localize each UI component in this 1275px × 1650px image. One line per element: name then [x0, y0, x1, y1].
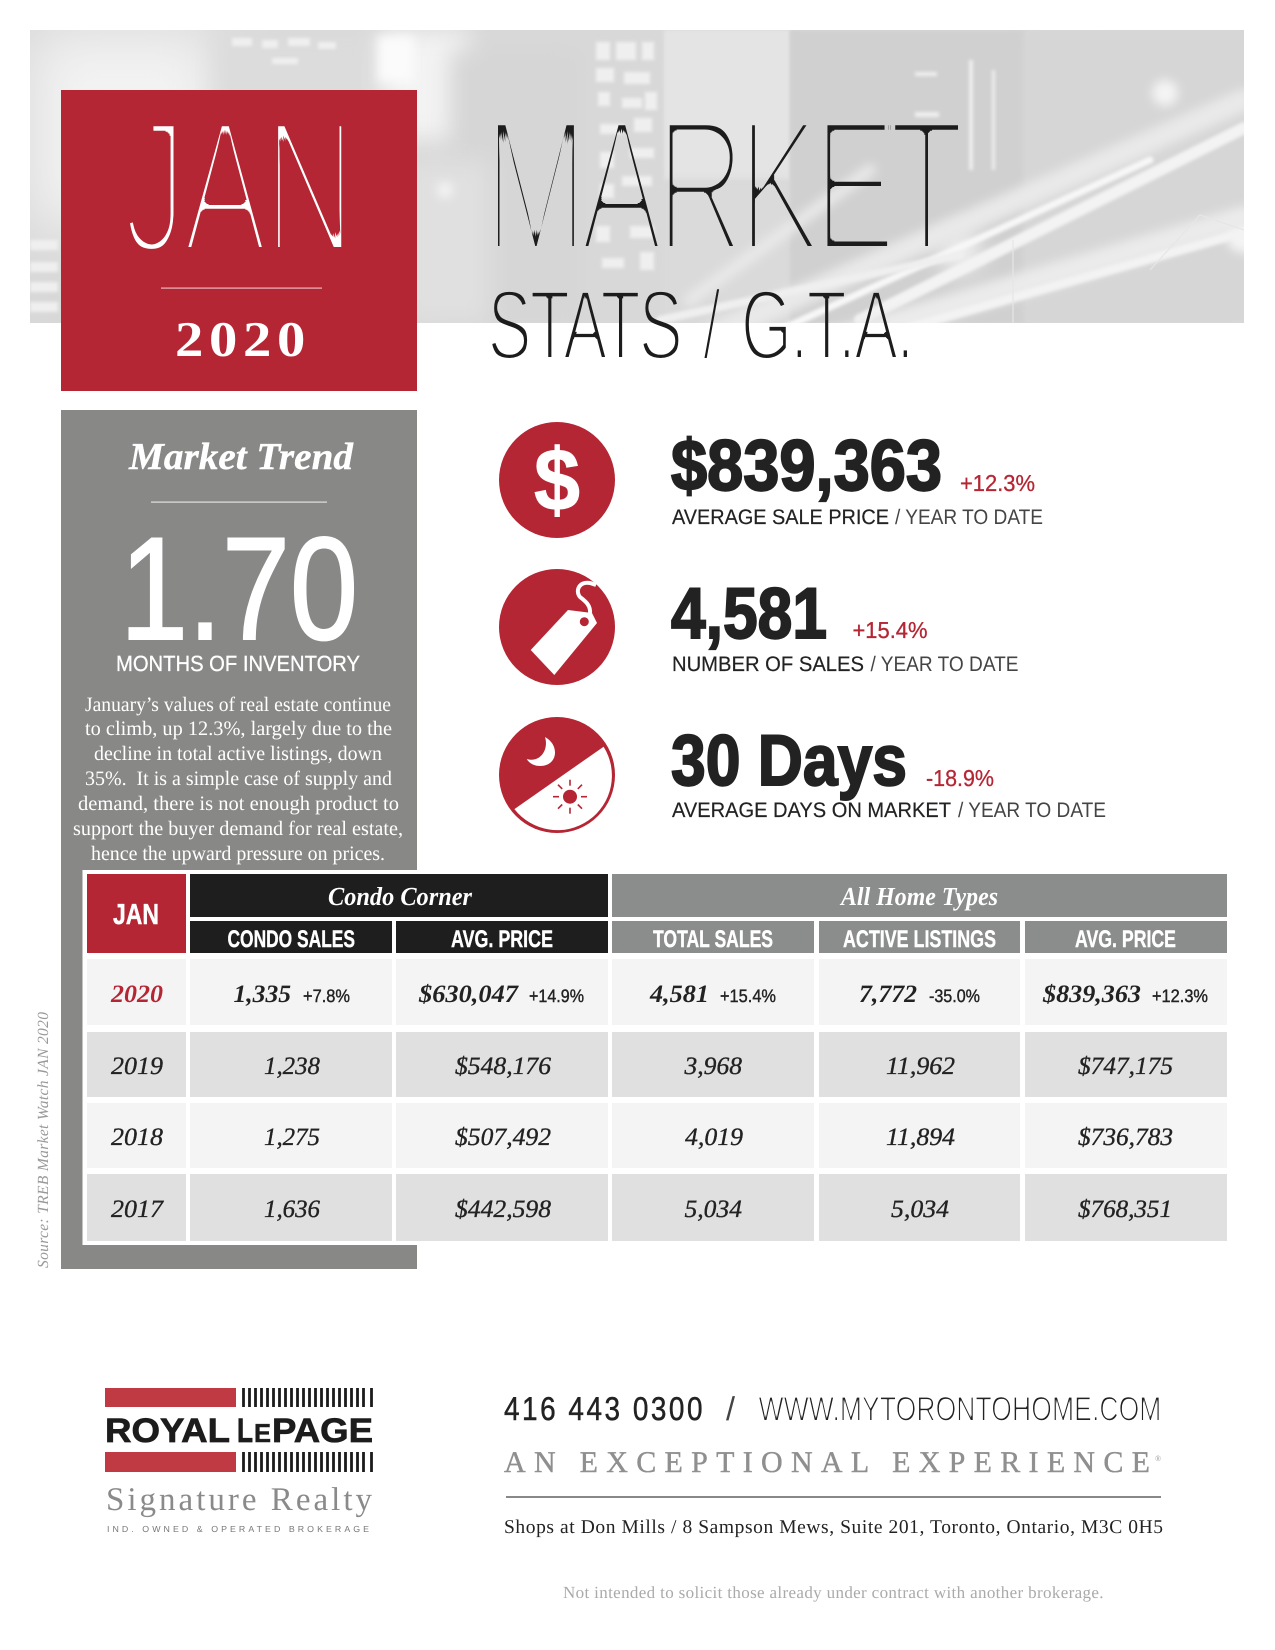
row 2017: 1,636: [264, 1196, 320, 1223]
row 2019: $548,176: [455, 1053, 552, 1080]
row 2017: 5,034: [891, 1196, 949, 1223]
source note: Source: TREB Market Watch JAN 2020: [35, 1012, 52, 1268]
value: 4,581: 4,581: [671, 574, 827, 654]
disclaimer: Not intended to solicit those already under contract with another brokerage.: [563, 1583, 1104, 1602]
subtitle: STATS / G.T.A.: STATS / G.T.A.: [487, 269, 912, 380]
row 2018: 11,894: [886, 1124, 955, 1151]
contact: phone and website: /: [726, 1390, 736, 1427]
label: average sale price: [672, 506, 1043, 529]
row 2018: $507,492: [455, 1124, 551, 1151]
label: number of sales: NUMBER OF SALES: [672, 653, 864, 676]
row 2020: [87, 959, 1227, 1025]
row 2019: 1,238: [264, 1053, 320, 1080]
row 2019: $747,175: [1078, 1053, 1173, 1080]
row 2018: 4,019: [685, 1124, 744, 1151]
logo wordmark: PAGE: [272, 1412, 373, 1450]
market trend paragraph: 35%. It is a simple case of supply and: [85, 768, 392, 790]
header: Condo Corner: Condo Corner: [328, 882, 473, 911]
header: All Home Types: [612, 874, 1227, 917]
row 2020: +15.4%: [720, 986, 776, 1006]
icon: price tag: [499, 569, 615, 685]
column headers: AVG. PRICE: [1075, 926, 1176, 953]
stat: number of sales: [499, 569, 1018, 685]
logo wordmark: [105, 1412, 373, 1450]
market trend paragraph: demand, there is not enough product to: [78, 793, 399, 815]
heading: Market Trend: Market Trend: [128, 436, 354, 478]
row 2017: $442,598: [455, 1196, 552, 1223]
background: grey city night photo: [30, 30, 1262, 345]
market trend paragraph: support the buyer demand for real estate,: [73, 818, 403, 840]
row 2020: $839,363: [1042, 981, 1141, 1008]
header: All Home Types: All Home Types: [839, 882, 998, 911]
row 2017: $768,351: [1078, 1196, 1172, 1223]
row 2019: [87, 1032, 1227, 1097]
row 2019: 3,968: [683, 1053, 743, 1080]
row 2019: 2019: [111, 1053, 164, 1080]
big number 1.70: 1.70: [120, 507, 358, 670]
logo: brokerage tagline: IND. OWNED & OPERATED BROKERAGE: [107, 1524, 369, 1534]
title: MARKET: MARKET: [483, 80, 962, 292]
market trend paragraph: decline in total active listings, down: [94, 743, 382, 765]
row 2018: $736,783: [1078, 1124, 1173, 1151]
market trend paragraph: hence the upward pressure on prices.: [91, 843, 385, 865]
contact: phone and website: WWW.MYTORONTOHOME.COM: [758, 1390, 1161, 1428]
panel: red date block: [61, 81, 417, 391]
row 2018: 1,275: [264, 1124, 320, 1151]
icon: dollar sign: [499, 422, 615, 538]
row 2020: $630,047: [418, 981, 520, 1008]
row 2018: [87, 1103, 1227, 1168]
market trend paragraph: [73, 694, 403, 865]
market trend paragraph: to climb, up 12.3%, largely due to the: [85, 718, 392, 740]
label: average sale price: / YEAR TO DATE: [895, 506, 1043, 529]
logo wordmark: L: [237, 1412, 253, 1450]
contact: phone and website: 416 443 0300: [504, 1390, 705, 1427]
row 2020: 1,335: [234, 981, 291, 1008]
month JAN: JAN: [122, 81, 350, 293]
column headers: TOTAL SALES: [653, 926, 773, 953]
label: average days on market: / YEAR TO DATE: [958, 799, 1106, 822]
label: average days on market: AVERAGE DAYS ON MARKET: [672, 799, 951, 822]
change: -18.9%: -18.9%: [926, 765, 994, 791]
row 2020: +14.9%: [529, 986, 584, 1006]
market trend paragraph: January’s values of real estate continue: [85, 694, 391, 716]
row 2020: 4,581: [649, 981, 709, 1008]
row 2017: 5,034: [684, 1196, 742, 1223]
label: number of sales: / YEAR TO DATE: [870, 653, 1018, 676]
header cell: JAN: [87, 874, 186, 953]
table header: [87, 874, 1227, 953]
logo wordmark: E: [254, 1418, 271, 1448]
logo: Signature Realty: Signature Realty: [106, 1482, 372, 1518]
panel: market trend: [61, 410, 417, 1269]
year 2020: 2020: [175, 311, 311, 367]
icon: dollar sign: $: [534, 430, 580, 529]
row 2017: 2017: [111, 1196, 165, 1223]
row 2020: +7.8%: [303, 986, 350, 1006]
column headers: CONDO SALES: [228, 926, 355, 953]
row 2020: -35.0%: [929, 986, 980, 1006]
row 2019: 11,962: [886, 1053, 955, 1080]
header: Condo Corner: [190, 874, 608, 917]
table: market statistics: [82, 870, 1227, 1245]
row 2020: 2020: [110, 981, 164, 1008]
row 2018: 2018: [111, 1124, 164, 1151]
contact: phone and website: [504, 1390, 1161, 1428]
stat: average sale price: [499, 422, 1043, 538]
label: average days on market: [672, 799, 1106, 822]
value: 30 Days: 30 Days: [671, 721, 907, 801]
column headers: AVG. PRICE: [451, 926, 553, 953]
label: number of sales: [672, 653, 1018, 676]
stat: days on market: [499, 717, 1106, 833]
row 2020: 7,772: [859, 981, 917, 1008]
label: months of inventory: MONTHS OF INVENTORY: [116, 651, 360, 676]
header cell: JAN: JAN: [113, 899, 159, 931]
change: +15.4%: +15.4%: [852, 617, 928, 643]
row 2020: +12.3%: [1152, 986, 1208, 1006]
column headers: ACTIVE LISTINGS: [843, 926, 996, 953]
value: $839,363: $839,363: [671, 426, 942, 506]
change: +12.3%: +12.3%: [960, 470, 1035, 496]
address: Shops at Don Mills / 8 Sampson Mews, Suite 201, Toronto, Ontario, M3C 0H5: [504, 1517, 1163, 1538]
label: average sale price: AVERAGE SALE PRICE: [672, 506, 889, 529]
column headers: [190, 921, 1227, 953]
logo: Royal LePage Signature Realty: [105, 1388, 373, 1534]
logo wordmark: ROYAL: [105, 1412, 230, 1450]
tagline: an exceptional experience: AN EXCEPTIONAL EXPERIENCE: [504, 1446, 1150, 1479]
icon: day and night: [499, 717, 615, 833]
tagline: an exceptional experience: ®: [1155, 1454, 1161, 1463]
row 2017: [87, 1174, 1227, 1241]
